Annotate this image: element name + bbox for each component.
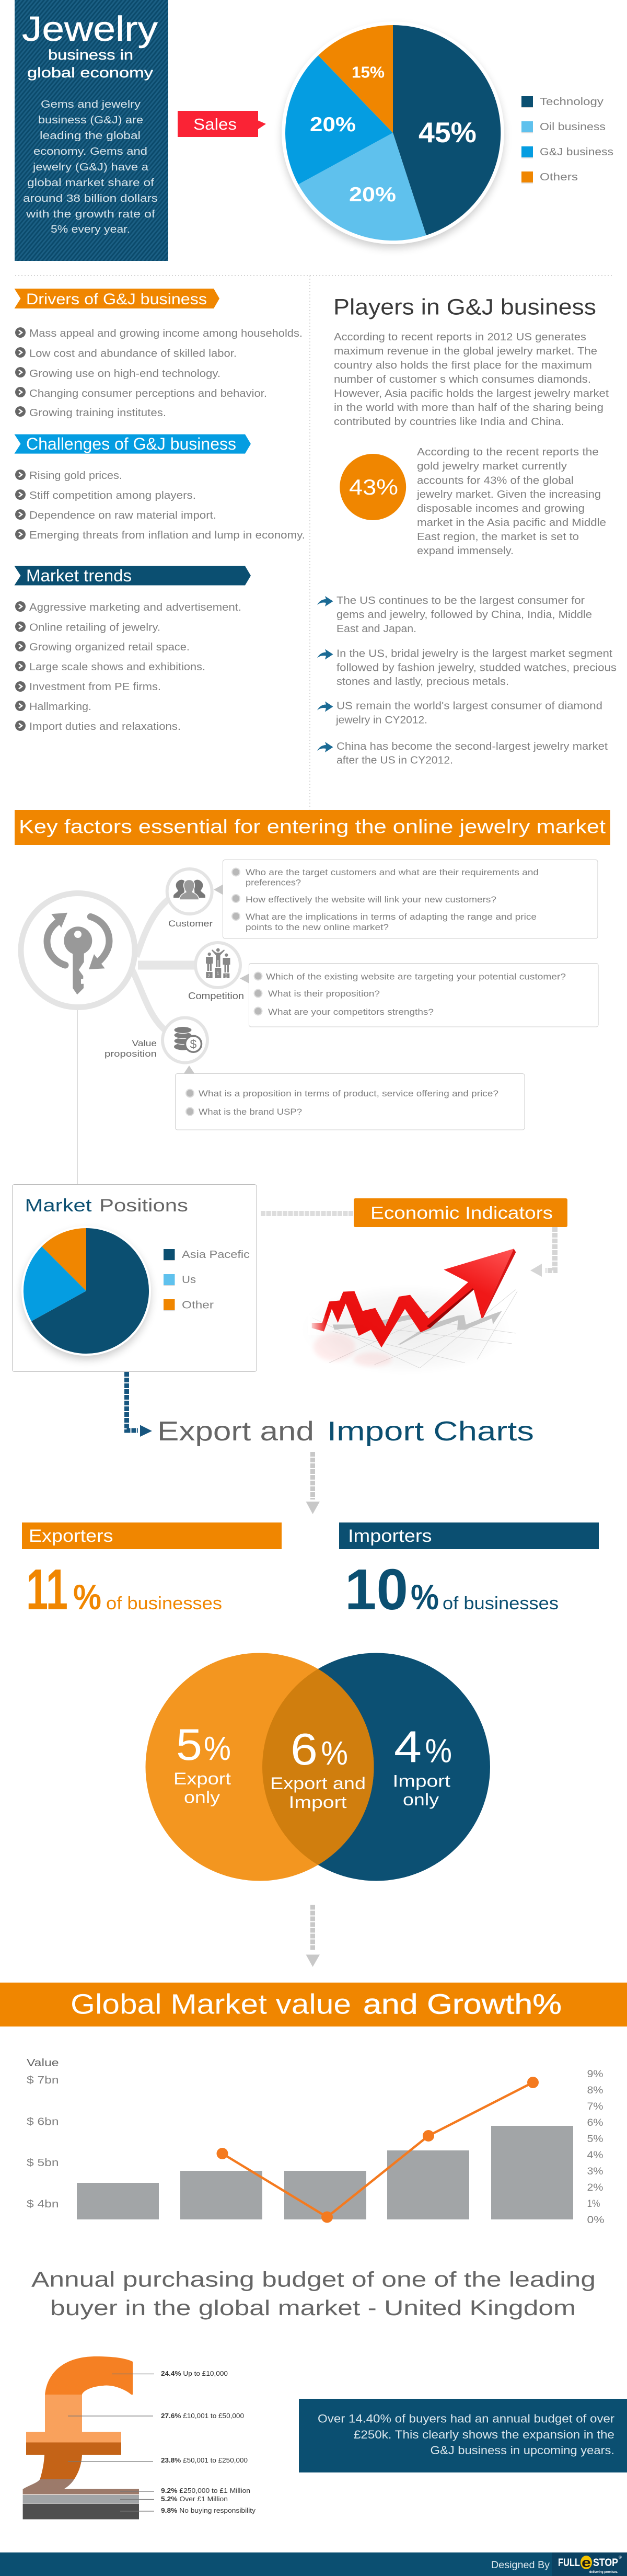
callout: buyers budget: £250k. This clearly shows the expansion in the [354,2428,614,2441]
text block: gold jewelry: market in the Asia pacific and Middle [417,517,606,529]
panel: drivers: Growing use on high-end technology. [29,368,220,380]
text block: gold jewelry [416,446,606,557]
text block: players intro: contributed by countries like India and China. [334,416,564,428]
panel: importers [339,1522,599,1622]
venn diagram: exporters and importers: Import [393,1771,450,1790]
text block: gold jewelry: According to the recent reports the [417,446,599,458]
panel: market trends: Import duties and relaxations. [29,721,181,732]
text block: gold jewelry: East region, the market is set to [417,531,579,543]
intro text: global market share of [27,177,155,189]
labels: budget bands: 9.2% £250,000 to £1 Million [161,2487,250,2494]
list: player facts: The US continues to be the largest consumer for [336,595,585,606]
panel: challenges [15,434,305,541]
venn diagram: exporters and importers: % [321,1734,348,1772]
axis: growth: 9% [587,2069,603,2080]
list: player facts: China has become the second-largest jewelry market [336,741,608,752]
text block: gold jewelry: jewelry market. Given the increasing [416,489,601,500]
panel: intro sidebar [15,0,168,261]
panel: market trends: Growing organized retail space. [29,642,190,653]
list: player facts: East and Japan. [336,623,416,635]
legend: sales pie [521,96,613,184]
icon: key with rotating arrows [21,893,135,1007]
labels: budget bands: 23.8% £50,001 to £250,000 [161,2456,248,2464]
title [22,9,158,81]
legend: market positions: Other [182,1300,214,1311]
list: player facts: after the US in CY2012. [336,755,453,766]
axis: growth: 4% [587,2150,603,2161]
panel: market trends: Investment from PE firms. [29,681,161,693]
panel: challenges: Dependence on raw material import. [29,510,216,521]
chart: market value and growth [27,2057,605,2226]
axis: growth: 1% [587,2199,600,2209]
panel: market trends: Aggressive marketing and advertisement. [29,602,241,613]
venn diagram: exporters and importers: only [184,1788,220,1807]
venn diagram: exporters and importers: 5 [176,1720,202,1770]
leader lines [68,2374,154,2511]
banner: key factors [15,810,610,845]
intro text: 5% every year. [51,224,130,235]
label: value proposition: Value [132,1038,157,1048]
panel: market trends: Hallmarking. [29,701,91,713]
legend: sales pie: Oil business [540,121,606,133]
labels: budget bands [161,2369,256,2514]
panel: value questions: What is the brand USP? [199,1107,302,1117]
panel: competition questions: What is their proposition? [268,989,380,999]
labels: budget bands: 27.6% £10,001 to £50,000 [161,2412,244,2420]
banner: global market [0,1983,627,2027]
panel: customer questions: Who are the target customers and what are their requirements and [246,867,539,877]
list: player facts: In the US, bridal jewelry is the largest market segment [336,648,612,660]
intro text: Gems and jewelry [41,99,141,110]
text block: players intro: in the world with more than half of the sharing being [334,402,603,414]
panel: drivers: Growing training institutes. [29,407,166,419]
legend: market positions: Asia Pacefic [182,1249,250,1261]
pie chart: market positions [21,1226,151,1359]
panel: drivers: Changing consumer perceptions and behavior. [29,388,267,399]
panel: challenges: Stiff competition among players. [29,490,196,501]
text block: players intro [334,331,609,428]
label: value proposition: proposition [104,1049,157,1059]
panel: challenges: Rising gold prices. [29,470,122,482]
labels: budget bands: 24.4% Up to £10,000 [161,2369,228,2377]
arrow: market positions to export charts [126,1372,152,1437]
labels: budget bands: 9.8% No buying responsibility [161,2506,256,2514]
heading: market positions: Positions [99,1196,188,1216]
panel: exporters: of businesses [106,1594,222,1613]
text block: players intro: However, Asia pacific holds the largest jewelry market [334,388,609,399]
panel: challenges: Emerging threats from inflation and lump in economy. [29,530,305,541]
text block: gold jewelry: disposable incomes and growing [417,503,585,514]
icon: competition: 2 [208,973,211,978]
axis: value: $ 6bn [27,2116,59,2128]
list: player facts: stones and lastly, precious metals. [336,676,509,688]
venn diagram: exporters and importers: only [403,1790,439,1809]
intro text: leading the global [40,130,141,142]
arrow: down to global market [306,1905,320,1967]
venn diagram: exporters and importers: % [204,1730,231,1767]
axis: growth: 5% [587,2134,603,2145]
heading: export and import: Export and [157,1416,314,1447]
axis: growth: 6% [587,2117,603,2128]
venn diagram: exporters and importers: 4 [394,1722,422,1772]
logo: fullestop: ® [619,2555,622,2560]
panel: exporters: % [73,1577,101,1617]
heading: export and import [157,1416,534,1447]
stat: 43 percent: 43% [349,475,398,499]
panel: market trends: Large scale shows and exhibitions. [29,661,205,673]
banner: global market: and Growth% [363,1989,562,2020]
axis: growth: 3% [587,2166,603,2177]
axis: growth [587,2069,605,2226]
panel: importers: % [411,1577,439,1617]
panel: value questions [176,1066,525,1130]
text block: gold jewelry: expand immensely. [417,545,514,557]
heading: annual purchasing budget: buyer in the global market - United Kingdom [50,2296,576,2320]
axis: value: Value [27,2057,59,2069]
label: competition: Competition [188,991,244,1001]
label: customer: Customer [168,919,213,929]
panel: market trends: Market trends [26,566,132,585]
title: Jewelry [22,9,158,49]
text block: players intro: country also holds the first place for the maximum [334,360,592,371]
heading: market positions [25,1196,188,1216]
icon: competition: 3 [225,974,228,979]
label: economic indicators [354,1198,567,1227]
panel: market trends: Online retailing of jewelry. [29,622,160,634]
axis: growth: 0% [587,2215,605,2226]
pie chart: sales share: 20% [349,184,396,206]
panel: importers: Importers [348,1526,432,1546]
title: global economy [27,65,154,81]
intro text: business (G&J) are [38,115,143,126]
panel: customer questions [214,860,598,938]
venn diagram: exporters and importers: Export [173,1769,231,1788]
callout: buyers budget [299,2399,627,2472]
bars: value [77,2126,573,2219]
stat: 43 percent [340,454,406,520]
panel: competition questions: What are your competitors strengths? [268,1007,434,1017]
panel: customer questions: What are the implications in terms of adapting the range and price [246,912,537,922]
pie chart: sales share [282,21,504,248]
pie chart: sales share: 20% [310,113,356,136]
legend: sales pie: G&J business [540,146,613,158]
logo: fullestop: e [582,2555,591,2570]
venn diagram: exporters and importers: % [425,1732,452,1769]
text block: players intro: number of customer s which consumes diamonds. [334,374,591,385]
panel: drivers: Mass appeal and growing income among households. [29,328,303,339]
venn diagram: exporters and importers: Import [288,1793,347,1812]
panel: customer questions: How effectively the website will link your new customers? [246,895,496,905]
axis: value [27,2057,59,2210]
heading: players: Players in G&J business [333,295,596,320]
heading: annual purchasing budget: Annual purchasing budget of one of the leading [31,2267,596,2291]
banner: global market: Global Market value [71,1989,351,2020]
callout: buyers budget: G&J business in upcoming years. [431,2444,614,2457]
icon: competition: 1 [216,971,219,976]
list: player facts [317,595,617,766]
venn diagram: exporters and importers: 6 [291,1725,318,1774]
panel: market trends [15,566,251,732]
pie chart: sales share: 15% [352,63,385,82]
axis: growth: 8% [587,2085,603,2096]
intro text: jewelry (G&J) have a [32,162,149,173]
panel: players [317,295,617,766]
label: value proposition [104,1038,157,1059]
panel: market positions [13,1185,257,1372]
chart: pound sign budget breakdown [23,2356,256,2519]
axis: growth: 2% [587,2182,603,2193]
icon: customer [167,869,212,914]
intro text: economy. Gems and [33,146,147,157]
axis: value: $ 4bn [27,2199,59,2210]
text block: players intro: According to recent reports in 2012 US generates [334,331,586,343]
heading: market positions: Market [25,1196,92,1216]
panel: customer questions: preferences? [246,877,301,888]
banner: key factors: Key factors essential for entering the online jewelry market [19,816,606,838]
panel: exporters: Exporters [29,1526,113,1546]
illustration: red growth arrow [301,1249,517,1375]
title: business in [48,47,133,63]
panel: drivers: Low cost and abundance of skilled labor. [29,348,237,360]
panel: importers: of businesses [443,1594,559,1613]
axis: growth: 7% [587,2101,603,2112]
logo: fullestop: delivering promises. [589,2571,618,2574]
heading: annual purchasing budget [31,2267,596,2320]
venn diagram: exporters and importers [145,1653,490,1881]
callout: sales tag: Sales [193,115,237,133]
axis: value: $ 7bn [27,2075,59,2086]
callout: sales tag [178,111,266,137]
arrow: dashed connectors around economic indicators [261,1213,555,1277]
callout: buyers budget: Over 14.40% of buyers had an annual budget of over [318,2412,614,2425]
intro text [23,99,158,235]
list: player facts: jewelry in CY2012. [335,714,427,726]
legend: sales pie: Technology [540,96,603,108]
text block: gold jewelry: gold jewelry market currently [417,461,567,472]
axis: value: $ 5bn [27,2157,59,2169]
legend: market positions: Us [182,1274,196,1286]
venn diagram: exporters and importers: Export and [270,1774,366,1793]
icon: value proposition [162,1017,207,1062]
connectors: key to factors [77,898,196,1184]
panel: importers: 10 [345,1558,408,1622]
panel: exporters: 11 [26,1558,68,1622]
panel: value questions: What is a proposition in terms of product, service offering and price? [199,1089,498,1098]
text block: players intro: maximum revenue in the global jewelry market. The [334,346,597,357]
pie chart: sales share: 45% [419,116,477,148]
line: growth [216,2077,539,2223]
list: player facts: US remain the world's largest consumer of diamond [336,701,602,712]
footer [0,2552,627,2576]
panel: exporters [22,1522,282,1622]
labels: budget bands: 5.2% Over £1 Million [161,2495,228,2503]
list: player facts: followed by fashion jewelry, studded watches, precious [336,662,617,673]
icon: value proposition: $ [190,1037,196,1051]
panel: competition questions: Which of the existing website are targeting your potential customer? [266,971,566,982]
panel: challenges: Challenges of G&J business [26,434,236,453]
icon: competition [195,943,240,988]
footer: Designed By [491,2560,550,2571]
panel: customer questions: points to the new online market? [246,922,389,932]
logo: fullestop [552,2552,627,2576]
legend: sales pie: Others [540,171,578,183]
panel: drivers [15,289,303,419]
label: economic indicators: Economic Indicators [370,1203,553,1222]
logo: fullestop: STOP [593,2557,618,2569]
intro text: with the growth rate of [26,209,156,220]
list: player facts: gems and jewelry, followed by China, India, Middle [336,609,592,621]
panel: competition questions [240,963,598,1027]
panel: drivers: Drivers of G&J business [26,291,207,308]
text block: gold jewelry: accounts for 43% of the global [417,475,574,486]
intro text: around 38 billion dollars [23,193,158,204]
heading: export and import: Import Charts [327,1416,534,1447]
legend: market positions [164,1249,250,1311]
arrow: down to exporters [306,1452,320,1514]
logo: fullestop: FULL [558,2557,580,2569]
